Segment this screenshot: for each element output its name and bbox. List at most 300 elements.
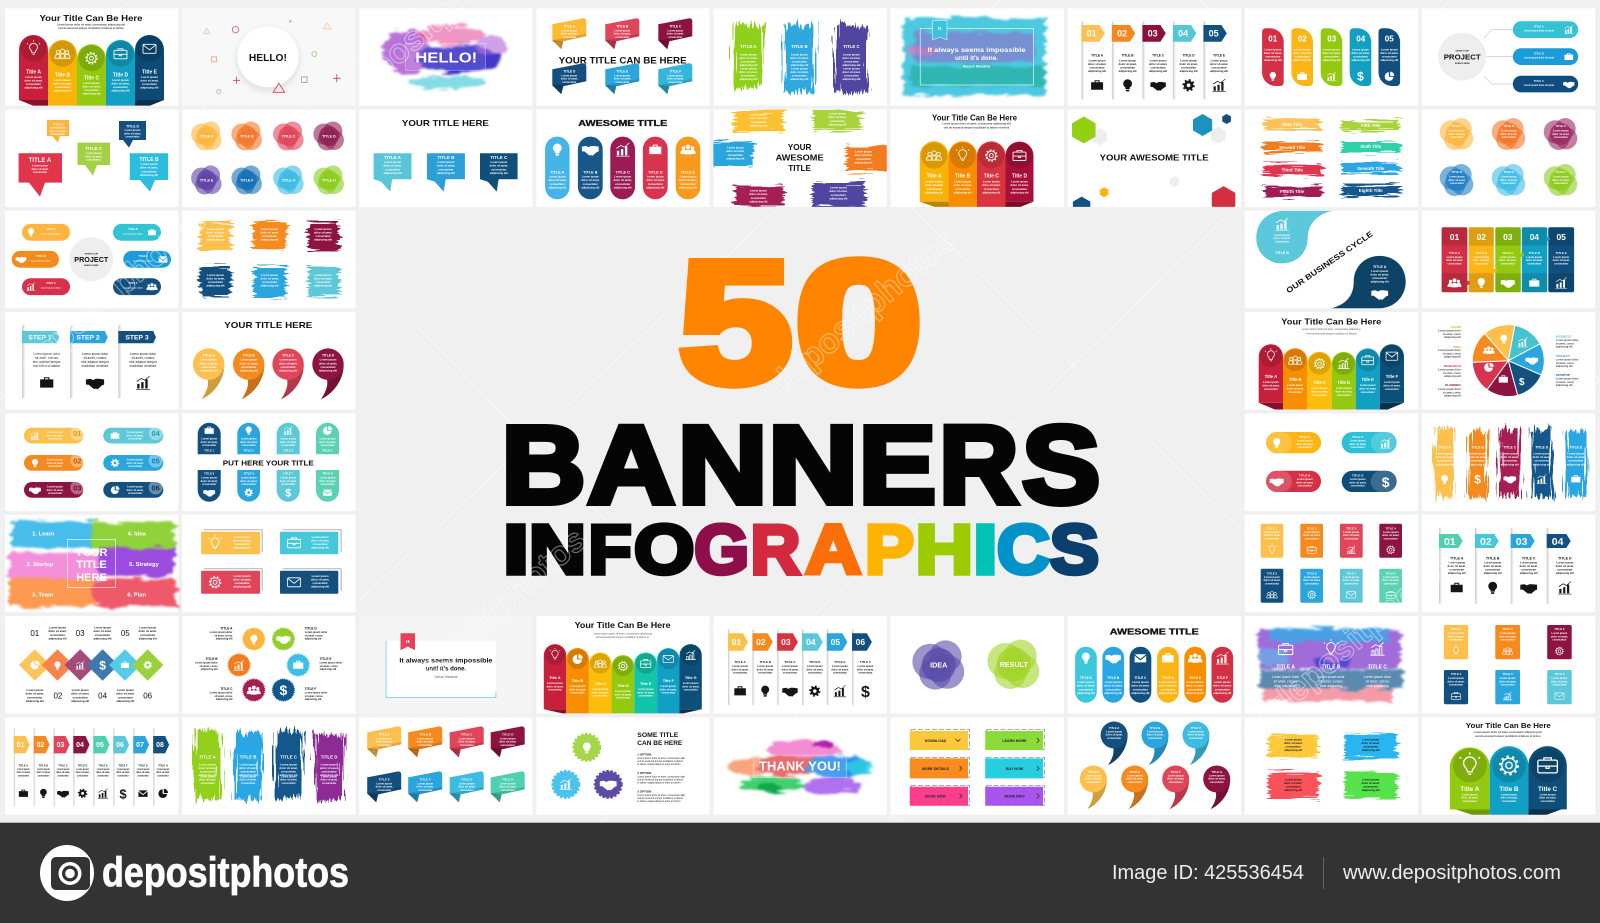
buttons: MORE DETAILS (922, 767, 950, 771)
columns: TITLE E (1556, 251, 1567, 255)
tabs: Title C (1313, 380, 1326, 385)
blobs: TITLE B (1504, 124, 1514, 128)
left labels (195, 627, 233, 701)
tabs: Title E (142, 69, 158, 75)
speech boxes: TITLE B (140, 157, 159, 163)
step labels: 4. Idea (128, 531, 146, 537)
bubbles: TITLE C (669, 24, 682, 28)
columns: 01 (1450, 232, 1459, 242)
leaf text: $ (1357, 69, 1364, 83)
project circle (69, 237, 113, 281)
tabs: Title F (663, 679, 675, 683)
heading (637, 732, 682, 747)
panel: six cards (1422, 616, 1595, 713)
cards: TITLE 1 (1451, 627, 1461, 631)
heading: Your Title Can Be Here (932, 113, 1018, 122)
options: 2 OPTION (637, 771, 651, 775)
icon: camera logo (40, 845, 94, 901)
top arches: TITLE 1 (204, 448, 215, 452)
tabs (19, 35, 164, 106)
pills: TITLE D (648, 171, 663, 175)
idea blob (912, 640, 964, 690)
flags: 07 (136, 742, 144, 749)
flags: 05 (96, 742, 104, 749)
step text and icons: etur adipisci tempor (33, 360, 62, 364)
cards (1444, 625, 1572, 704)
brush text: TITLE D (1535, 446, 1549, 450)
heading: SOME TITLE (637, 732, 678, 739)
tabs: Title B (1499, 786, 1519, 793)
stroke labels: Third Title (1282, 168, 1303, 173)
brushes (733, 25, 867, 91)
brush text (1435, 446, 1585, 486)
stroke labels: Fourth Title (1280, 189, 1305, 194)
badges (228, 628, 309, 701)
tabs: Title A (1265, 374, 1277, 379)
hexagons (1072, 114, 1235, 217)
brush text: TITLE A (1438, 446, 1451, 450)
options (637, 752, 686, 803)
panel: project with three connected pills (1422, 8, 1595, 106)
options: sed do eiusmod tempor incididunt ut labore (637, 797, 684, 800)
panel: five vertical brushes (1422, 414, 1595, 511)
leaf shapes (1262, 28, 1400, 86)
title columns: Lorem ipsum dolor (1272, 675, 1300, 679)
watermark text overlay: depositphotos (762, 221, 964, 403)
headline BANNERS: E (859, 404, 936, 527)
step text and icons: incididunt ut labore (130, 364, 157, 368)
shaded columns (22, 325, 122, 398)
tabs: Title C (984, 174, 999, 180)
stroke labels: Fifth Title (1361, 123, 1381, 128)
panel: six arch tabs with title: elit sed eiusmod tempor incididunt ut labore (1306, 332, 1357, 336)
stroke labels: Second Title (1279, 145, 1306, 150)
step flags: STEP 1 (28, 335, 52, 342)
numbers and text: 04 (98, 692, 108, 701)
panel: six blobs with text (1422, 110, 1595, 207)
tabs: Title D (113, 72, 128, 78)
right labels: STARTUP (1556, 373, 1570, 377)
stroke labels: First Title (1282, 122, 1303, 127)
column text and icons: TITLE C (58, 764, 68, 767)
bubbles: TITLE G (461, 777, 473, 781)
leaf text: 03 (1327, 34, 1337, 43)
right labels: TITLE E (320, 657, 331, 661)
step text and icons: incididunt ut labore (82, 364, 109, 368)
flags (728, 633, 872, 651)
blob: title B: TITLE B (1275, 251, 1289, 255)
buttons: BUY NOW (1006, 767, 1024, 771)
column text and icons: TITLE E (98, 764, 108, 767)
flags: 02 (37, 742, 44, 749)
column text and icons: TITLE E (834, 660, 845, 664)
panel: six diamonds (5, 616, 178, 713)
panel: our business cycle (1245, 211, 1418, 308)
panel: four vertical brushes (182, 717, 356, 815)
columns: TITLE A (1449, 251, 1461, 255)
brushes (1269, 734, 1397, 798)
options: 1 OPTION (637, 752, 651, 756)
column text and icons: TITLE C (1522, 556, 1536, 560)
panel: your awesome title with rough bars (708, 110, 891, 207)
column text and icons: TITLE C (1152, 53, 1165, 57)
step text and icons: sit amet, consec (83, 356, 107, 360)
blob: title A: TITLE A (1373, 265, 1387, 269)
strokes (1264, 119, 1400, 197)
numbers and text: 01 (30, 629, 40, 638)
column text and icons: TITLE B (1122, 53, 1134, 57)
panel: five arch tabs with title (5, 8, 178, 106)
bubbles: TITLE E (616, 69, 628, 73)
headline INFOGRAPHICS: R (751, 510, 800, 588)
logo wordmark: depositphotos (102, 848, 349, 896)
bubbles: TITLE B (616, 24, 629, 28)
footer bar (0, 823, 1600, 923)
quote frame: until it's done. (955, 55, 998, 62)
brush text: TITLE B (240, 754, 256, 759)
cards (1261, 524, 1402, 603)
cards: TITLE 6 (1307, 571, 1317, 575)
column text and icons: TITLE A (734, 660, 747, 664)
heading: Your Title Can Be Here (575, 621, 671, 630)
column text and icons (1448, 556, 1574, 594)
flags: 01 (17, 742, 24, 749)
flags: 01 (1444, 536, 1456, 548)
tabs (920, 141, 1034, 207)
drops: TITLE G (1211, 770, 1222, 774)
panel: six arch tabs with title (1245, 312, 1418, 410)
pie icons (1483, 335, 1538, 388)
watermark text overlay: depositphotos (12, 201, 214, 383)
panel: three vertical brushes (713, 8, 887, 106)
step labels: 6. Plan (127, 592, 147, 598)
pills: TITLE B (1107, 676, 1120, 680)
rough bars (708, 110, 891, 207)
tabs: Title D (1337, 380, 1350, 385)
cards (201, 532, 338, 594)
flags: 02 (1117, 29, 1127, 39)
thank you frame (753, 755, 847, 777)
quote text: Nelson Mandela (434, 675, 458, 679)
pills: Lorem ipsum dolor sit amet (1524, 56, 1554, 59)
column text and icons: TITLE D (1558, 556, 1572, 560)
column text and icons (17, 764, 170, 801)
left labels: IDEA (1454, 345, 1462, 349)
cards: TITLE 1 (1267, 526, 1277, 530)
step text and icons: incididunt ut labore (33, 364, 60, 368)
pills: TITLE B (36, 255, 46, 258)
center frame (67, 539, 116, 587)
pills: Lorem ipsum dolor (31, 260, 51, 262)
pills: TITLE D (128, 228, 138, 231)
step labels: 2. Startup (27, 562, 54, 568)
shaded columns (728, 629, 854, 705)
pills: Lorem ipsum dolor (133, 260, 153, 262)
panel: speech rectangles (5, 110, 178, 207)
bottom arches: TITLE 5 (204, 472, 215, 476)
center frame: YOUR (76, 547, 107, 559)
pills (12, 224, 171, 295)
right labels (1556, 335, 1578, 387)
pills: TITLE A (1080, 676, 1093, 680)
left labels: PLANNING (1445, 383, 1461, 387)
project circle: ENTER YOUR (1456, 50, 1469, 52)
offset outlines (204, 530, 341, 591)
pie icons: $ (1519, 377, 1525, 388)
connectors (1484, 30, 1513, 84)
step text and icons: Lorem ipsum dolor (130, 352, 157, 356)
stroke labels: Seventh Title (1357, 166, 1385, 171)
panel: watercolor three titles (1245, 616, 1418, 713)
flags (1081, 25, 1227, 42)
bubbles: TITLE D (563, 69, 576, 73)
leaf text (1264, 34, 1399, 83)
step flags: STEP 3 (125, 335, 149, 342)
tabs: Title E (640, 682, 652, 686)
step flags: STEP 2 (76, 335, 100, 342)
bubbles: TITLE F (669, 69, 681, 73)
tabs: Title A (1460, 786, 1480, 793)
buttons (910, 731, 1043, 806)
pills (1075, 647, 1233, 703)
shaded columns (14, 728, 155, 806)
buttons: MORE INFO (1004, 794, 1025, 798)
panel: six arch tabs with title: Lorem ipsum dolor sit amet, consectetur adipiscing (1302, 327, 1361, 331)
column text and icons: TITLE F (860, 660, 871, 664)
brushes (194, 731, 343, 799)
heading: OUR BUSINESS CYCLE (1285, 229, 1375, 295)
heading: YOUR (788, 143, 812, 152)
leaf text: 01 (1268, 34, 1278, 43)
right pills: 05 (152, 456, 160, 466)
headline INFOGRAPHICS: G (694, 510, 749, 588)
shaded columns (1081, 21, 1206, 99)
pills: Lorem ipsum dolor (123, 287, 143, 289)
flags: 01 (1087, 29, 1097, 39)
watercolor blocks (9, 521, 176, 607)
numbers and text: 06 (143, 692, 153, 701)
headline INFOGRAPHICS: S (1050, 510, 1099, 588)
bottom arches: $ (285, 488, 291, 500)
bottom arches: TITLE 8 (322, 472, 333, 476)
title columns: TITLE A (1276, 665, 1295, 671)
brush text: TITLE A (199, 754, 217, 759)
drops: TITLE C (1191, 726, 1201, 730)
drops (1080, 721, 1230, 809)
leaf text: 04 (1356, 34, 1366, 43)
drops: TITLE C (282, 354, 295, 358)
tabs (1259, 344, 1404, 410)
blobs: TITLE B (240, 134, 254, 138)
brush text (739, 44, 861, 81)
drops: TITLE E (1129, 770, 1140, 774)
top arches (198, 423, 339, 454)
blobs: TITLE A (200, 134, 214, 138)
flags: 01 (732, 637, 741, 647)
brush text: $ (1474, 472, 1481, 486)
speech boxes (19, 120, 168, 197)
drops: TITLE F (1171, 770, 1181, 774)
hello frame (406, 43, 486, 70)
step text and icons: Lorem ipsum dolor (33, 352, 61, 356)
pills: TITLE F (128, 282, 138, 285)
pills: TITLE E (1189, 676, 1201, 680)
bubbles: TITLE A (379, 732, 391, 736)
brush text (198, 754, 339, 785)
heading: YOUR AWESOME TITLE (1100, 153, 1209, 162)
title columns: tetur adipiscing (1275, 684, 1297, 688)
headline INFOGRAPHICS: H (916, 510, 973, 588)
column text and icons: TITLE D (78, 764, 88, 767)
panel: hello circle (182, 8, 356, 106)
center frame: HERE (76, 572, 107, 584)
step flags (22, 331, 156, 343)
watercolor wash (1259, 628, 1403, 701)
tabs: Title G (685, 676, 697, 680)
pills: TITLE E (681, 171, 696, 175)
panel: seven arch tabs with title: Lorem ipsum dolor sit amet, consectetur adipiscing (593, 632, 652, 636)
panel: four two-tone pills (1245, 414, 1418, 511)
heading: Your Title Can Be Here (1466, 721, 1551, 730)
cards: TITLE 4 (1451, 672, 1461, 676)
left labels: RESEARCH (1444, 364, 1461, 368)
tabs: Title B (955, 174, 971, 180)
title columns: sit amet, consec (1319, 680, 1343, 684)
column text and icons: TITLE B (1486, 556, 1500, 560)
panel: quote card (359, 616, 533, 713)
headline INFOGRAPHICS (503, 510, 1099, 588)
title columns: TITLE C (1368, 665, 1387, 671)
tabs: Title A (549, 676, 561, 680)
panel: eight cards (1245, 515, 1418, 612)
panel: awesome title six pills (1068, 616, 1241, 713)
center frame: TITLE (76, 559, 107, 571)
numbers and text: 02 (53, 692, 63, 701)
panel: four arch tabs with title (890, 110, 1064, 207)
flags: 02 (756, 637, 766, 647)
pills: TITLE C (1352, 435, 1364, 439)
cards: TITLE 7 (1346, 571, 1357, 575)
brush text: TITLE A (740, 44, 757, 49)
heading (776, 143, 824, 173)
image id: Image ID: 425536454 (1112, 862, 1304, 884)
flags: 05 (1209, 29, 1219, 39)
pills: Lorem ipsum dolor (41, 287, 61, 289)
brush text: TITLE D (321, 754, 337, 759)
headline BANNERS: S (1022, 404, 1100, 527)
title columns: sit amet, consec (1366, 680, 1390, 684)
bubbles: TITLE E (379, 777, 390, 781)
headline INFOGRAPHICS: I (503, 510, 529, 588)
diamond icons (30, 659, 151, 673)
blobs: TITLE C (282, 134, 296, 138)
columns: TITLE D (1529, 251, 1541, 255)
panel: your awesome title hexagons (1068, 110, 1241, 217)
column text and icons: TITLE A (1450, 556, 1464, 560)
panel: watercolor six steps (5, 515, 178, 612)
panel: six brush rectangles (182, 211, 356, 308)
panel: four outlined cards (182, 515, 356, 612)
brush text (1284, 737, 1380, 792)
heading: Your Title Can Be Here (1281, 318, 1382, 327)
pills: TITLE F (1216, 676, 1228, 680)
pills: TITLE C (1134, 676, 1147, 680)
brush text: TITLE C (1503, 446, 1517, 450)
columns: 04 (1530, 232, 1539, 242)
project circle: PROJECT (1444, 52, 1481, 61)
right labels: BUSINESS (1556, 335, 1571, 339)
bottom arches: TITLE 6 (244, 472, 254, 476)
boxes: TITLE C (490, 155, 508, 160)
headline BANNERS: R (939, 404, 1018, 527)
panel: eight 3d bubbles (359, 717, 533, 815)
pills: TITLE A (550, 171, 565, 175)
column text and icons (732, 660, 874, 701)
headline INFOGRAPHICS: C (997, 510, 1050, 588)
pills: TITLE D (1352, 474, 1364, 478)
title columns: tetur adipiscing (1320, 684, 1342, 688)
heading: PUT HERE YOUR TITLE (223, 458, 314, 467)
result blob (987, 640, 1039, 689)
project circle: ENTER YOUR (85, 253, 98, 255)
column text and icons: TITLE B (760, 660, 772, 664)
heading: YOUR TITLE HERE (402, 118, 489, 128)
bottom arches: TITLE 7 (283, 472, 294, 476)
right pills: 04 (152, 429, 161, 438)
columns: TITLE B (1476, 251, 1488, 255)
title columns: Lorem ipsum dolor (1317, 675, 1346, 679)
panel: leaf columns 01-05 (1245, 8, 1418, 106)
numbers and text (26, 626, 157, 703)
watercolor splash (725, 739, 873, 793)
heading: Your Title Can Be Here (40, 14, 143, 23)
options: 3 OPTION (637, 789, 651, 793)
options: Lorem ipsum dolor sit amet, consectetur adip (637, 757, 686, 760)
flags: 04 (806, 637, 816, 647)
pills: TITLE A (1534, 24, 1544, 28)
flags: 08 (156, 742, 164, 749)
drops: TITLE D (322, 354, 335, 358)
pills: TITLE C (1534, 79, 1544, 83)
boxes: TITLE A (384, 155, 402, 160)
flags: 03 (1516, 536, 1528, 548)
column text and icons: TITLE A (1091, 53, 1104, 57)
numbers and text: 03 (76, 629, 85, 638)
tabs (544, 644, 702, 713)
right pills: 06 (152, 484, 160, 492)
top arches: TITLE 3 (283, 448, 294, 452)
step text and icons: Lorem ipsum dolor (82, 352, 109, 356)
quote frame (920, 21, 1034, 85)
title columns: TITLE B (1322, 665, 1341, 671)
columns: 02 (1477, 232, 1486, 242)
bubbles: TITLE A (563, 24, 576, 28)
pills: TITLE A (46, 228, 56, 231)
panel: some title with three options (536, 717, 710, 815)
headline INFOGRAPHICS: O (634, 510, 694, 588)
panel: seven slice pie (1422, 312, 1595, 410)
panel: eight horizontal brush titles (1245, 110, 1418, 207)
options: Lorem ipsum dolor sit amet, consectetur adip (637, 794, 686, 797)
pills: TITLE B (1299, 474, 1311, 478)
column text and icons: TITLE D (809, 660, 821, 664)
left labels: TITLE B (206, 657, 218, 661)
panel: four bright brush rectangles (1245, 717, 1418, 815)
column text and icons: TITLE H (158, 764, 168, 767)
left pills (24, 426, 84, 498)
big orange number 50: 5 (679, 225, 792, 419)
panel: flags 01-06 (713, 616, 887, 713)
